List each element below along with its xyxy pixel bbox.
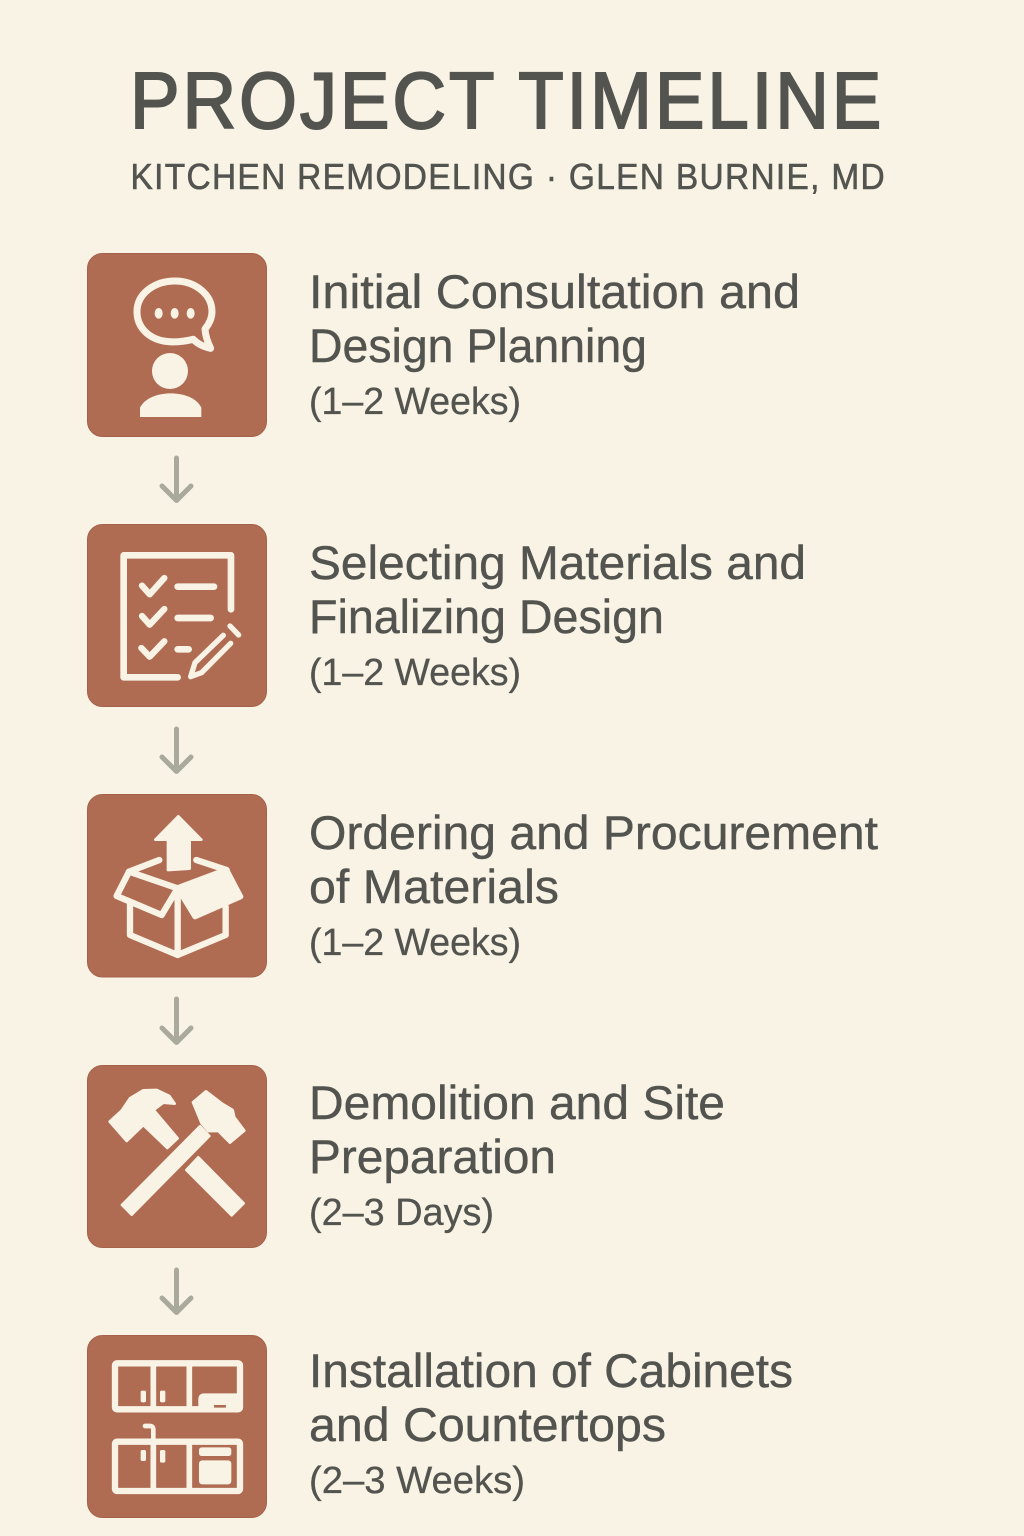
step 2: selecting materials xyxy=(88,524,806,706)
step 3 text: (1–2 Weeks) xyxy=(309,922,521,964)
step 4 text: Preparation xyxy=(309,1130,556,1183)
step 2 text: (1–2 Weeks) xyxy=(309,652,521,694)
step 1 text: (1–2 Weeks) xyxy=(309,381,521,423)
step 3 text xyxy=(309,806,878,964)
step 4 text xyxy=(309,1076,725,1234)
step 1 text xyxy=(309,265,800,423)
step 4 text: Demolition and Site xyxy=(309,1076,725,1129)
step 1 text: Initial Consultation and xyxy=(309,265,800,318)
step 1 text: Design Planning xyxy=(309,319,647,372)
icon: checklist and pencil xyxy=(88,524,266,706)
step 3 text: Ordering and Procurement xyxy=(309,806,878,859)
title: PROJECT TIMELINE xyxy=(130,57,881,146)
step 2 text xyxy=(309,536,806,694)
icon: crossed hammers xyxy=(88,1066,266,1248)
step 4 text: (2–3 Days) xyxy=(309,1192,494,1234)
subtitle: KITCHEN REMODELING · GLEN BURNIE, MD xyxy=(130,158,885,197)
step 4: demolition xyxy=(88,1066,725,1248)
icon: consultation speech bubble and person xyxy=(88,254,266,436)
step 3 text: of Materials xyxy=(309,860,559,913)
arrow 2 xyxy=(162,729,191,772)
step 5: installation xyxy=(88,1336,793,1518)
step 5 text: and Countertops xyxy=(309,1398,666,1451)
step 2 text: Selecting Materials and xyxy=(309,536,806,589)
icon: open box with up arrow xyxy=(88,794,266,977)
step 1: initial consultation xyxy=(88,254,800,436)
arrow 1 xyxy=(162,458,191,500)
step 3: ordering and procurement xyxy=(88,794,878,977)
step 5 text: Installation of Cabinets xyxy=(309,1344,793,1397)
step 5 text: (2–3 Weeks) xyxy=(309,1460,525,1502)
arrow 4 xyxy=(162,1270,191,1312)
step 2 text: Finalizing Design xyxy=(309,590,664,643)
step 5 text xyxy=(309,1344,793,1502)
arrow 3 xyxy=(162,999,191,1042)
icon: kitchen cabinets xyxy=(88,1336,266,1518)
